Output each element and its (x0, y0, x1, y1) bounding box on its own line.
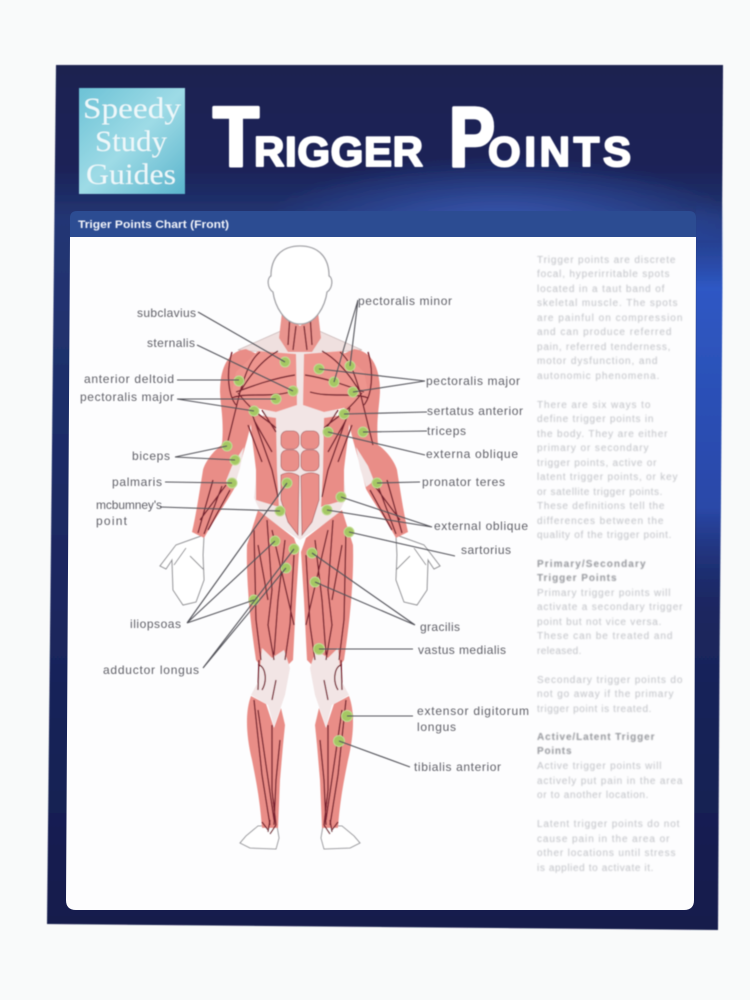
active/latent section: other locations until stress (537, 848, 676, 859)
intro paragraph: autonomic phenomena. (537, 371, 660, 382)
anatomical figure (160, 246, 440, 849)
torso tendon layer (254, 352, 300, 540)
primary/secondary section: Primary trigger points will (537, 588, 671, 599)
intro paragraph: and can produce referred (537, 327, 672, 338)
muscle labels (80, 294, 529, 774)
muscle labels: pronator teres (422, 475, 505, 489)
primary/secondary section: not go away if the primary (537, 689, 674, 700)
arm with deltoid (192, 349, 270, 538)
intro paragraph (537, 255, 683, 382)
muscle labels: palmaris (112, 475, 162, 489)
logo: Speedy Study Guides: Study (95, 125, 167, 158)
intro paragraph: are painful on compression (537, 313, 683, 324)
muscle labels: triceps (427, 424, 466, 438)
intro paragraph: skeletal muscle. The spots (537, 298, 678, 309)
pectoral (232, 351, 297, 412)
definitions paragraph: There are six ways to (537, 400, 651, 411)
left half of body (160, 312, 300, 849)
dark muscle lines (198, 315, 296, 834)
primary/secondary section: Secondary trigger points do (537, 675, 683, 686)
primary/secondary section: released. (537, 646, 582, 657)
chart header bar: Triger Points Chart (Front) (78, 219, 229, 231)
muscle labels: sartorius (461, 543, 511, 557)
muscle labels: vastus medialis (418, 643, 506, 657)
card background (47, 65, 723, 930)
active/latent section: actively put pain in the area (537, 776, 683, 787)
muscle labels: pectoralis minor (358, 294, 452, 308)
muscle labels: externa oblique (426, 447, 518, 461)
head outline (268, 246, 332, 324)
trigger point markers (222, 357, 382, 746)
primary/secondary section: Trigger Points (537, 573, 617, 584)
definitions paragraph (537, 400, 678, 541)
definitions paragraph: trigger points, active or (537, 458, 657, 469)
primary/secondary section: trigger point is treated. (537, 704, 652, 715)
title (213, 90, 631, 184)
thigh (247, 510, 299, 668)
white content panel (66, 237, 696, 910)
definitions paragraph: the body. They are either (537, 429, 668, 440)
definitions paragraph: quality of the trigger point. (537, 530, 672, 541)
primary/secondary section: point but not vice versa. (537, 617, 662, 628)
intro paragraph: pain, referred tenderness, (537, 342, 671, 353)
active/latent section: Active trigger points will (537, 761, 662, 772)
chart header bar (70, 211, 696, 238)
logo: Speedy Study Guides (79, 88, 185, 194)
neck muscle (279, 312, 300, 352)
active/latent section: Latent trigger points do not (537, 819, 680, 830)
abdominal blocks (281, 431, 299, 535)
active/latent section: Active/Latent Trigger (537, 732, 655, 743)
muscle labels: tibialis anterior (414, 760, 501, 774)
definitions paragraph: latent trigger points, or key (537, 472, 678, 483)
muscle labels: point (96, 514, 128, 528)
title: OINTS (488, 128, 631, 175)
primary/secondary section: activate a secondary trigger (537, 602, 683, 613)
logo: Speedy Study Guides: Speedy (83, 92, 181, 125)
definitions paragraph: These definitions tell the (537, 501, 665, 512)
active/latent section: is applied to activate it. (537, 863, 654, 874)
intro paragraph: located in a taut band of (537, 284, 665, 295)
leader lines (160, 300, 455, 767)
intro paragraph: Trigger points are discrete (537, 255, 676, 266)
muscle labels: longus (417, 720, 456, 734)
muscle labels: gracilis (420, 620, 460, 634)
active/latent section: cause pain in the area or (537, 834, 670, 845)
definitions paragraph: differences between the (537, 516, 664, 527)
active/latent section: or to another location. (537, 790, 649, 801)
muscle labels: sternalis (147, 336, 195, 350)
muscle labels: mcbumney's (96, 498, 162, 512)
muscle labels: sertatus anterior (427, 404, 523, 418)
title: P (449, 90, 495, 184)
definitions paragraph: define trigger points in (537, 414, 654, 425)
muscle labels: external oblique (434, 519, 528, 533)
muscle labels: pectoralis major (426, 374, 520, 388)
hand outline (160, 535, 204, 605)
muscle labels: biceps (132, 449, 170, 463)
primary/secondary section: Primary/Secondary (537, 559, 646, 570)
muscle labels: pectoralis major (80, 390, 174, 404)
serratus and oblique side (251, 414, 279, 507)
side text column (537, 255, 683, 874)
right half of body (mirrored) (300, 312, 440, 849)
muscle labels: iliopsoas (130, 617, 181, 631)
muscle labels: anterior deltoid (84, 372, 174, 386)
title: T (213, 90, 259, 184)
intro paragraph: motor dysfunction, and (537, 356, 658, 367)
title: RIGGER (254, 128, 423, 175)
active/latent section (537, 732, 683, 874)
muscle labels: adductor longus (103, 663, 199, 677)
muscle labels: subclavius (137, 306, 196, 320)
trapezius tendon (238, 330, 290, 354)
primary/secondary section: These can be treated and (537, 631, 673, 642)
knee tendon (251, 648, 290, 727)
active/latent section: Points (537, 746, 572, 757)
intro paragraph: focal, hyperirritable spots (537, 269, 670, 280)
logo: Speedy Study Guides: Guides (86, 158, 176, 191)
definitions paragraph: primary or secondary (537, 443, 649, 454)
lower leg (247, 696, 285, 828)
foot outline (240, 826, 279, 849)
definitions paragraph: or satellite trigger points. (537, 487, 663, 498)
elbow tendon (226, 447, 244, 487)
primary/secondary section (537, 559, 683, 715)
muscle labels: extensor digitorum (417, 704, 529, 718)
